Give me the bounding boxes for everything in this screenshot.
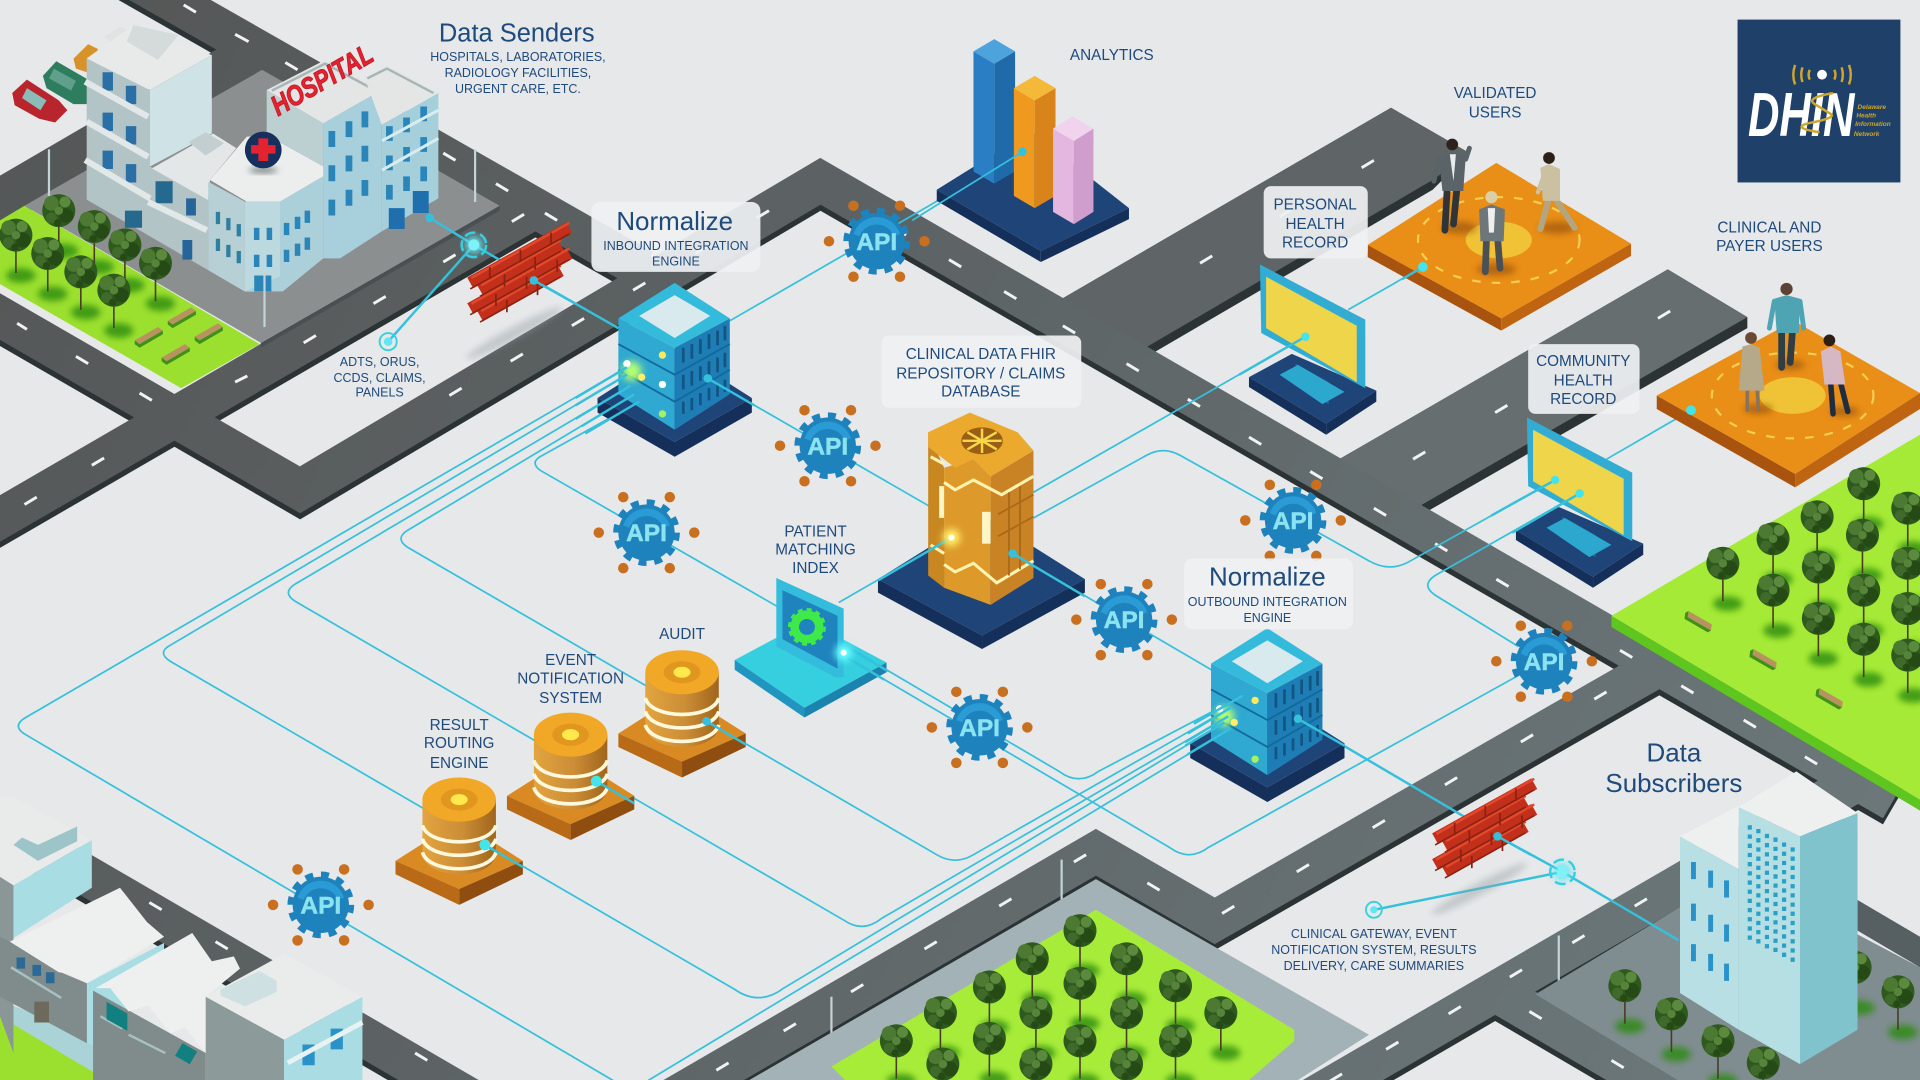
data subscribers building	[1680, 771, 1858, 1064]
person: man in grey suit	[1434, 139, 1477, 234]
label: clinical and payer users: CLINICAL AND	[1717, 220, 1821, 237]
orange car	[73, 44, 98, 73]
label: outbound deliveries: DELIVERY, CARE SUMMARIES	[1284, 959, 1464, 973]
hospital sign: HOSPITAL	[265, 38, 379, 122]
logo tagline: Delaware	[1858, 104, 1886, 111]
label: clinical data repository	[882, 336, 1081, 408]
API gear: patient matching to outbound	[927, 687, 1033, 768]
API gear: bottom left	[268, 864, 374, 946]
heading: data senders	[430, 20, 606, 96]
label: patient matching index: INDEX	[792, 560, 839, 577]
green car	[43, 61, 88, 104]
label: outbound normalize: Normalize	[1209, 563, 1326, 591]
label: clinical data repository: DATABASE	[941, 384, 1020, 401]
heading: data subscribers: Subscribers	[1605, 770, 1742, 798]
label: patient matching index: PATIENT	[784, 523, 847, 540]
label: community health record	[1528, 344, 1640, 414]
API gear: analytics: API	[856, 229, 897, 256]
monitor: community health record	[1491, 418, 1643, 588]
red cross emblem	[245, 132, 282, 173]
label: outbound normalize: ENGINE	[1243, 611, 1291, 625]
second house	[93, 933, 240, 1080]
API gear: patient matching: API	[626, 520, 667, 547]
park: left green with trees and benches	[0, 194, 260, 388]
label: interfaces: ADTS, ORUS,	[340, 355, 419, 369]
label: analytics: ANALYTICS	[1070, 47, 1154, 64]
park: bottom green with trees	[749, 879, 1369, 1080]
label: inbound normalize: INBOUND INTEGRATION	[603, 239, 749, 253]
label: result routing engine: RESULT	[430, 717, 489, 734]
label: validated users: USERS	[1469, 105, 1521, 122]
API gear: inbound to repository	[775, 405, 881, 486]
label: personal health record: PERSONAL	[1273, 196, 1357, 213]
hospital sidewalk block	[24, 70, 500, 348]
outbound integration server	[1185, 628, 1344, 802]
label: personal health record: RECORD	[1282, 234, 1348, 251]
person: man in tan suit	[1538, 152, 1576, 234]
label: clinical data repository: CLINICAL DATA FHIR	[906, 346, 1056, 363]
label: inbound normalize: ENGINE	[652, 255, 700, 269]
label: interfaces: CCDS, CLAIMS,	[334, 371, 426, 385]
heading: data senders: HOSPITALS, LABORATORIES,	[430, 50, 606, 64]
API gear: community record: API	[1273, 508, 1313, 535]
label: validated users: VALIDATED	[1454, 85, 1536, 102]
API gear: community outbound	[1491, 620, 1597, 702]
label: result routing engine	[424, 717, 494, 772]
label: community health record: COMMUNITY	[1536, 353, 1630, 370]
event notification database	[507, 713, 634, 840]
firewall: inbound	[464, 223, 569, 364]
logo tagline: Network	[1854, 131, 1880, 138]
label: outbound normalize: OUTBOUND INTEGRATION	[1188, 595, 1347, 609]
API gear: analytics	[824, 200, 930, 282]
label: inbound normalize: Normalize	[616, 208, 733, 236]
API gears	[268, 200, 1597, 946]
red car	[12, 80, 67, 122]
heading: data subscribers: Data	[1646, 740, 1702, 768]
label: community health record: RECORD	[1550, 391, 1616, 408]
person: woman in beige dress	[1739, 332, 1773, 414]
label: personal health record	[1264, 186, 1368, 258]
label: result routing engine: ENGINE	[430, 755, 489, 772]
label: interfaces	[334, 355, 426, 400]
API gear: bottom left: API	[300, 892, 341, 919]
label: clinical and payer users: PAYER USERS	[1716, 238, 1823, 255]
label: patient matching index	[775, 523, 856, 577]
heading: data senders: Data Senders	[439, 20, 595, 48]
label: clinical data repository: REPOSITORY / CLAIMS	[896, 365, 1065, 382]
label: result routing engine: ROUTING	[424, 735, 494, 752]
label: validated users	[1454, 85, 1536, 122]
first house	[0, 888, 164, 1046]
heading: data subscribers	[1605, 740, 1742, 798]
label: interfaces: PANELS	[355, 386, 404, 400]
bottom right sidewalk and trees	[1536, 872, 1920, 1080]
API gear: community record	[1240, 480, 1346, 561]
result routing database	[396, 778, 523, 905]
person: man in teal shirt	[1769, 283, 1805, 370]
street lamps	[49, 149, 1559, 1053]
DHIN logo	[1738, 20, 1900, 182]
bottom left houses	[0, 797, 362, 1080]
API gear: repository to outbound	[1071, 579, 1177, 660]
label: outbound deliveries	[1271, 927, 1477, 973]
label: event notification system: SYSTEM	[539, 690, 602, 707]
logo tagline: Information	[1855, 121, 1891, 128]
validated users platform	[1368, 139, 1631, 331]
analytics bar chart	[912, 39, 1129, 262]
API gear: patient matching	[594, 492, 700, 573]
label: personal health record: HEALTH	[1285, 216, 1345, 233]
firewall: outbound	[1429, 779, 1534, 920]
label: clinical and payer users	[1716, 220, 1823, 255]
API gear: repository to outbound: API	[1104, 607, 1144, 634]
label: outbound deliveries: NOTIFICATION SYSTEM, RESULTS	[1271, 943, 1477, 957]
connection lines	[18, 152, 1691, 1080]
label: patient matching index: MATCHING	[775, 542, 856, 559]
label: outbound normalize	[1184, 558, 1353, 629]
label: event notification system: EVENT	[545, 652, 596, 669]
heading: data senders: RADIOLOGY FACILITIES,	[445, 66, 591, 80]
DHIN logo: DHIN	[1748, 80, 1856, 150]
label: inbound normalize	[591, 202, 760, 272]
park: right green with trees and benches	[1611, 435, 1920, 811]
hospital building	[85, 25, 438, 292]
person: woman in grey jacket	[1477, 191, 1516, 276]
API gear: inbound to repository: API	[807, 433, 848, 460]
API gear: patient matching to outbound: API	[959, 715, 1000, 742]
clinical data repository tower	[878, 413, 1085, 649]
label: event notification system	[517, 652, 624, 707]
heading: data senders: URGENT CARE, ETC.	[455, 82, 581, 96]
logo tagline	[1854, 104, 1891, 138]
connection nodes and reticles	[380, 214, 1575, 918]
clinical and payer users platform	[1657, 283, 1920, 487]
parked cars	[12, 27, 132, 122]
patient matching index	[735, 578, 888, 718]
label: event notification system: NOTIFICATION	[517, 670, 624, 687]
audit database	[618, 650, 746, 778]
connection dots on databases	[479, 717, 746, 867]
logo tagline: Health	[1856, 113, 1876, 120]
monitor: personal health record	[1239, 264, 1376, 435]
label: outbound deliveries: CLINICAL GATEWAY, EVENT	[1291, 927, 1457, 941]
API gear: community outbound: API	[1524, 649, 1564, 676]
white car	[104, 27, 132, 47]
third building	[206, 954, 362, 1080]
inbound integration server	[576, 283, 754, 457]
corner tower	[0, 797, 92, 1053]
label: audit: AUDIT	[659, 626, 705, 643]
person: woman in pink shirt	[1821, 335, 1859, 416]
label: community health record: HEALTH	[1554, 373, 1613, 390]
